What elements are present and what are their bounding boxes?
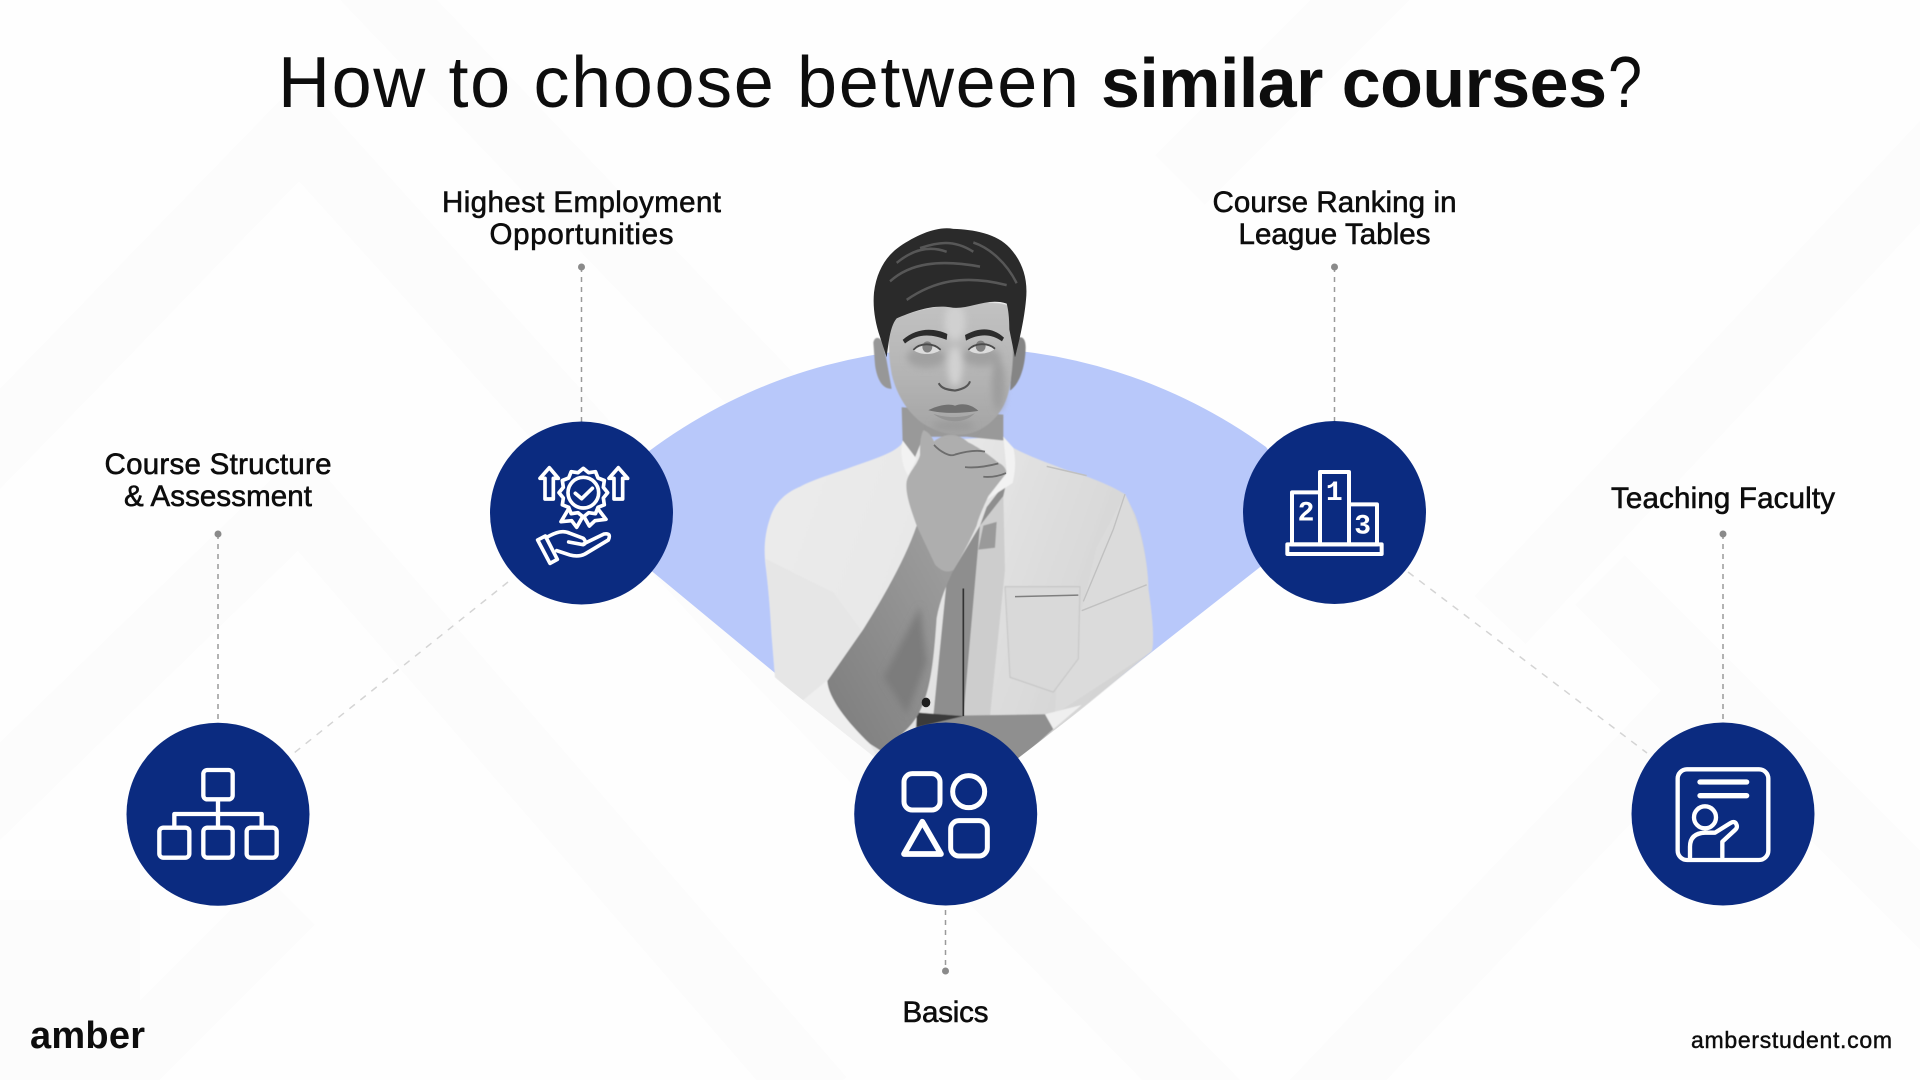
icon: award on hand: [490, 422, 673, 604]
label: Highest Employment Opportunities: Highest Employment: [442, 186, 721, 219]
title: How to choose between: [278, 43, 1079, 123]
website url: amberstudent.com: [1691, 1027, 1892, 1053]
title: [278, 43, 1642, 123]
label: Course Structure and Assessment: & Assessment: [124, 480, 312, 513]
label: Highest Employment Opportunities: [442, 186, 721, 251]
chart: blue fan sector: [590, 348, 1320, 814]
connector: dashed diagonal right: [1408, 572, 1647, 753]
label: Course Ranking in League Tables: [1212, 186, 1456, 251]
logo: amber: amber: [30, 1015, 145, 1057]
connector: Basics: [942, 910, 949, 974]
label: Course Ranking in League Tables: Course Ranking in: [1212, 186, 1456, 219]
photo: thinking young man: [765, 228, 1153, 762]
connector: Highest Employment: [578, 264, 585, 422]
icon: basic shapes: [854, 722, 1037, 906]
connector: Course Structure: [214, 530, 222, 723]
connector: Course Ranking: [1331, 264, 1338, 422]
label: Course Structure and Assessment: Course Structure: [104, 448, 332, 481]
title: ?: [1608, 43, 1642, 123]
icon: podium ranking: 1: [1326, 478, 1343, 509]
icon: podium ranking: 2: [1298, 499, 1314, 530]
label: Teaching Faculty: Teaching Faculty: [1611, 482, 1835, 515]
connector: Teaching Faculty: [1720, 530, 1726, 723]
label: Course Structure and Assessment: [104, 448, 332, 513]
icon: org structure: [126, 723, 310, 906]
label: Basics: Basics: [902, 996, 988, 1029]
label: Course Ranking in League Tables: League Tables: [1238, 218, 1430, 251]
icon: teacher at board: [1632, 722, 1814, 906]
icon: podium ranking: [1243, 421, 1426, 604]
title: similar courses: [1101, 44, 1607, 122]
icon: podium ranking: 3: [1354, 511, 1371, 542]
connector: dashed diagonal left: [294, 582, 508, 753]
label: Highest Employment Opportunities: Opportunities: [490, 218, 674, 251]
